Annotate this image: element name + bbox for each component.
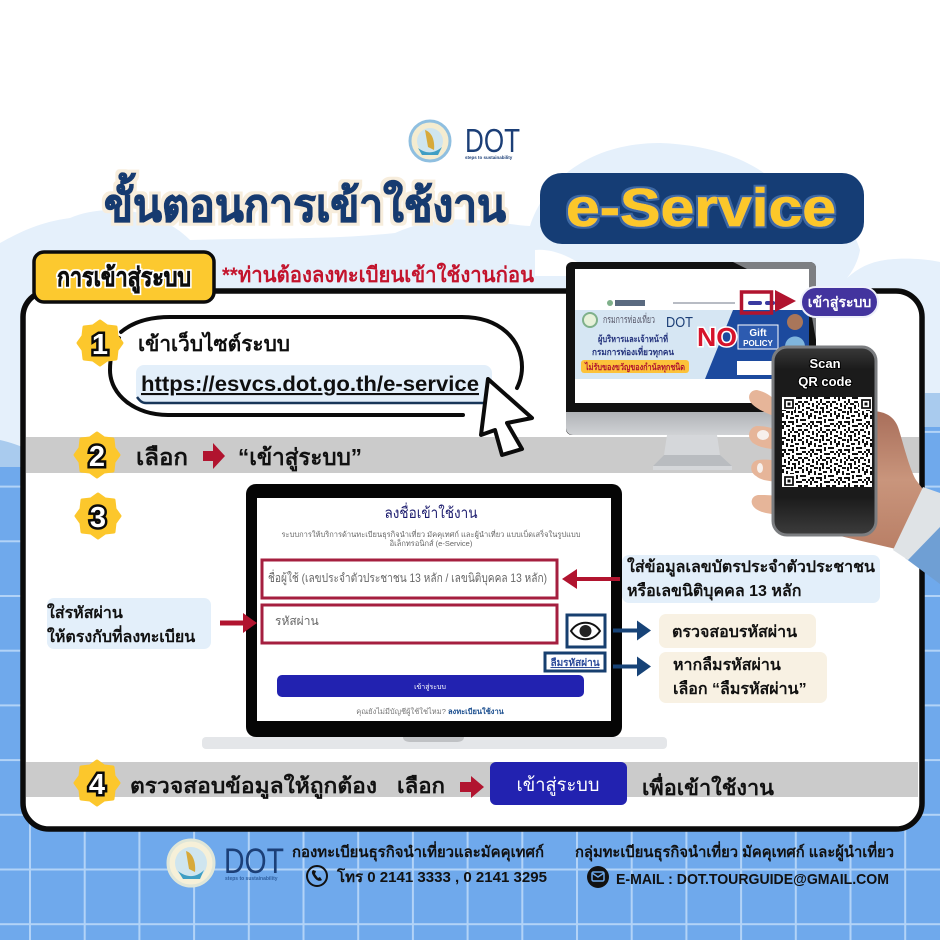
icon: phone <box>307 866 327 886</box>
website banner: ไม่รับของขวัญของกำนัลทุกชนิด <box>584 361 685 373</box>
step 4 <box>75 761 775 805</box>
step 2 label: เลือก <box>136 444 188 470</box>
password callout: ใส่รหัสผ่าน <box>47 603 123 622</box>
step 2 value: “เข้าสู่ระบบ” <box>238 444 362 472</box>
check password callout <box>659 614 816 648</box>
phone caption <box>798 356 852 389</box>
url bubble outline <box>110 317 522 415</box>
badge 2: 2 <box>89 441 105 473</box>
badge 1 <box>78 321 122 365</box>
url box: https://esvcs.dot.go.th/e-service <box>141 373 479 396</box>
arrow <box>203 443 225 469</box>
website nav <box>607 300 735 306</box>
step 1 <box>78 317 532 455</box>
website banner: NO <box>697 322 737 352</box>
section tag: login: การเข้าสู่ระบบ <box>57 262 191 294</box>
logo: DOT: DOT <box>465 122 520 159</box>
website banner: กรมการท่องเที่ยว <box>603 312 655 326</box>
badge 1: 1 <box>92 329 108 361</box>
logo: ministry seal <box>410 121 450 161</box>
QR code <box>782 397 872 487</box>
arrow: username <box>562 569 620 589</box>
footer DOT logo: DOT <box>224 842 284 881</box>
password callout <box>47 598 211 649</box>
phone body <box>773 347 876 535</box>
title badge: e-Service <box>540 173 864 244</box>
forgot password <box>545 653 605 671</box>
register prompt: คุณยังไม่มีบัญชีผู้ใช้ใช่ไหม? ลงทะเบียนใช้งาน <box>356 707 505 716</box>
laptop screen <box>246 484 622 737</box>
arrow <box>460 776 484 798</box>
monitor <box>566 262 878 470</box>
section tag: login <box>34 252 214 302</box>
monitor body <box>566 262 816 435</box>
login description: อิเล็กทรอนิกส์ (e-Service) <box>389 538 473 548</box>
step 1 label: เข้าเว็บไซต์ระบบ <box>138 330 290 356</box>
login button <box>490 762 627 805</box>
check password callout: ตรวจสอบรหัสผ่าน <box>672 623 797 641</box>
monitor stand <box>653 435 732 470</box>
password field <box>262 605 557 643</box>
fingers <box>749 390 780 515</box>
forgot password: ลืมรหัสผ่าน <box>550 657 600 669</box>
website banner: Gift <box>749 328 767 339</box>
ID callout <box>622 555 880 603</box>
highlight box <box>742 292 775 313</box>
website banner: POLICY <box>743 339 774 348</box>
arrow: forgot <box>613 656 651 676</box>
login heading: ลงชื่อเข้าใช้งาน <box>384 502 478 522</box>
step 4 tail: เพื่อเข้าใช้งาน <box>642 772 775 800</box>
logo: DOT: steps to sustainability <box>465 155 513 160</box>
group name: กลุ่มทะเบียนธุรกิจนำเที่ยว มัคคุเทศก์ และผู้นำเที่ยว <box>575 841 894 862</box>
forgot callout: เลือก “ลืมรหัสผ่าน” <box>673 680 807 698</box>
division name: กองทะเบียนธุรกิจนำเที่ยวและมัคคุเทศก์ <box>292 841 544 862</box>
hand <box>830 411 925 549</box>
arrow: password <box>220 613 257 633</box>
login description: ระบบการให้บริการด้านทะเบียนธุรกิจนำเที่ยว มัคคุเทศก์ และผู้นำเที่ยว แบบเบ็ดเสร็จในรูปแบบ <box>282 529 581 539</box>
email: E-MAIL : DOT.TOURGUIDE@GMAIL.COM <box>616 871 889 888</box>
login pill: เข้าสู่ระบบ <box>808 294 871 311</box>
ID callout: หรือเลขนิติบุคคล 13 หลัก <box>627 582 801 601</box>
phone numbers: โทร 0 2141 3333 , 0 2141 3295 <box>336 867 547 886</box>
registration note: **ท่านต้องลงทะเบียนเข้าใช้งานก่อน <box>222 262 535 287</box>
arrow <box>775 290 796 312</box>
title badge: e-Service: e-Service <box>566 178 836 238</box>
logos top <box>410 121 520 161</box>
step 2 <box>75 433 362 477</box>
step 4 label: ตรวจสอบข้อมูลให้ถูกต้อง <box>130 773 377 800</box>
badge 4: 4 <box>89 769 105 801</box>
eye icon <box>567 615 605 647</box>
footer DOT logo: steps to sustainability <box>225 876 278 882</box>
website banner: กรมการท่องเที่ยวทุกคน <box>592 345 675 358</box>
phone caption: Scan <box>809 356 841 371</box>
cuff <box>893 487 940 560</box>
ID callout: ใส่ข้อมูลเลขบัตรประจำตัวประชาชน <box>627 557 875 578</box>
icon: email <box>587 866 609 888</box>
login description <box>282 529 581 548</box>
website banner <box>575 310 809 379</box>
monitor screen <box>575 269 809 403</box>
badge 4 <box>75 761 119 805</box>
forgot callout <box>659 652 827 703</box>
laptop base <box>202 737 667 749</box>
login button: เข้าสู่ระบบ <box>414 683 446 691</box>
username field <box>262 560 557 598</box>
login button: เข้าสู่ระบบ <box>516 775 600 796</box>
step 4 choose: เลือก <box>397 774 445 798</box>
finger nails <box>757 430 769 473</box>
main panel <box>23 291 922 829</box>
username field: ชื่อผู้ใช้ (เลขประจำตัวประชาชน 13 หลัก / เลขนิติบุคคล 13 หลัก) <box>268 569 547 586</box>
phone caption: QR code <box>798 374 852 389</box>
hand and phone <box>749 347 940 584</box>
badge 2 <box>75 433 119 477</box>
badge 3: 3 <box>90 502 106 534</box>
step 2 band <box>26 437 919 473</box>
url box <box>136 365 492 403</box>
login pill <box>801 287 878 317</box>
forgot callout: หากลืมรหัสผ่าน <box>673 656 781 674</box>
step 4 band <box>26 762 918 797</box>
arrow: eye <box>613 620 651 640</box>
icon: cursor <box>481 379 532 455</box>
footer <box>168 840 894 888</box>
login button <box>277 675 584 697</box>
password field: รหัสผ่าน <box>275 614 319 628</box>
badge 3 <box>76 494 120 538</box>
step 3 <box>47 484 880 749</box>
sleeve <box>905 520 940 584</box>
password callout: ให้ตรงกับที่ลงทะเบียน <box>47 625 195 646</box>
website banner: ผู้บริหารและเจ้าหน้าที่ <box>598 332 668 345</box>
title: ขั้นตอนการเข้าใช้งาน <box>104 172 506 231</box>
website banner: DOT <box>666 314 693 331</box>
footer seal <box>168 840 214 886</box>
